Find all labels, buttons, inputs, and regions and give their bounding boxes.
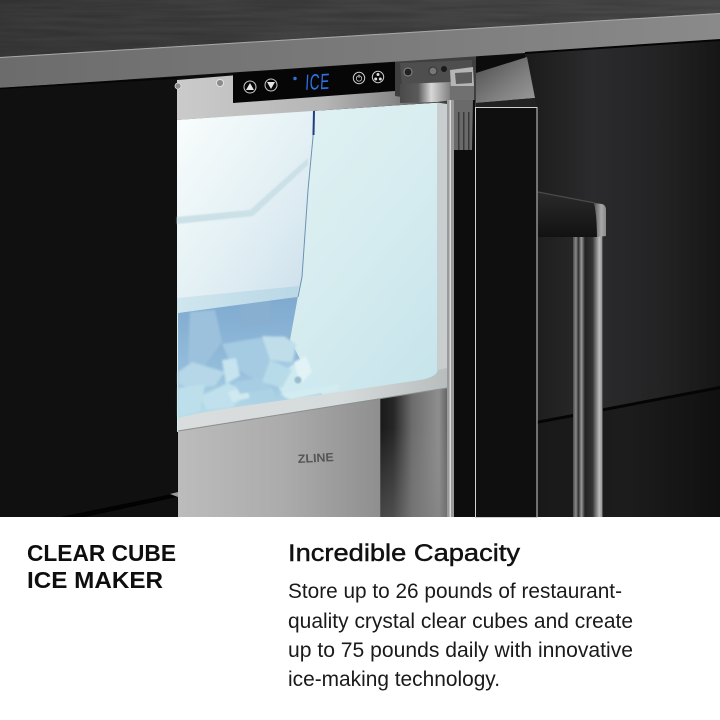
feature description <box>288 579 633 691</box>
indicator dot <box>293 77 297 80</box>
icon: door handle <box>538 192 606 517</box>
panel: top stainless strip <box>177 58 447 120</box>
panel: hinge assembly <box>395 56 476 517</box>
panel: door <box>476 57 537 518</box>
bottom lip of opening <box>178 368 447 431</box>
icon: fan button <box>372 71 384 83</box>
right rim <box>437 102 447 392</box>
panel: ice maker interior <box>177 102 447 432</box>
feature description: ice-making technology. <box>288 667 500 691</box>
display readout: ICE <box>305 68 331 95</box>
icon: up button <box>244 81 256 93</box>
icon: power button <box>353 72 365 84</box>
feature description: up to 75 pounds daily with innovative <box>288 638 633 662</box>
ice storage area <box>178 296 340 420</box>
product title <box>27 540 176 593</box>
icon: mounting screws <box>175 80 224 89</box>
feature description: quality crystal clear cubes and create <box>288 609 633 633</box>
product title: ICE MAKER <box>27 567 163 593</box>
panel: right cabinet fronts <box>525 38 720 517</box>
panel: left cabinet front <box>0 77 178 517</box>
feature description: Store up to 26 pounds of restaurant- <box>288 579 622 603</box>
icon: down button <box>265 79 277 91</box>
feature heading: Incredible Capacity <box>288 540 521 567</box>
photo: ice maker installed under counter <box>0 0 720 518</box>
product title: CLEAR CUBE <box>27 540 176 566</box>
control panel display <box>233 62 395 103</box>
countertop <box>0 0 720 88</box>
back wall <box>177 102 447 432</box>
ice bin cover <box>177 110 314 313</box>
panel: stainless lower front <box>178 368 447 517</box>
logo: ZLINE <box>297 450 334 466</box>
